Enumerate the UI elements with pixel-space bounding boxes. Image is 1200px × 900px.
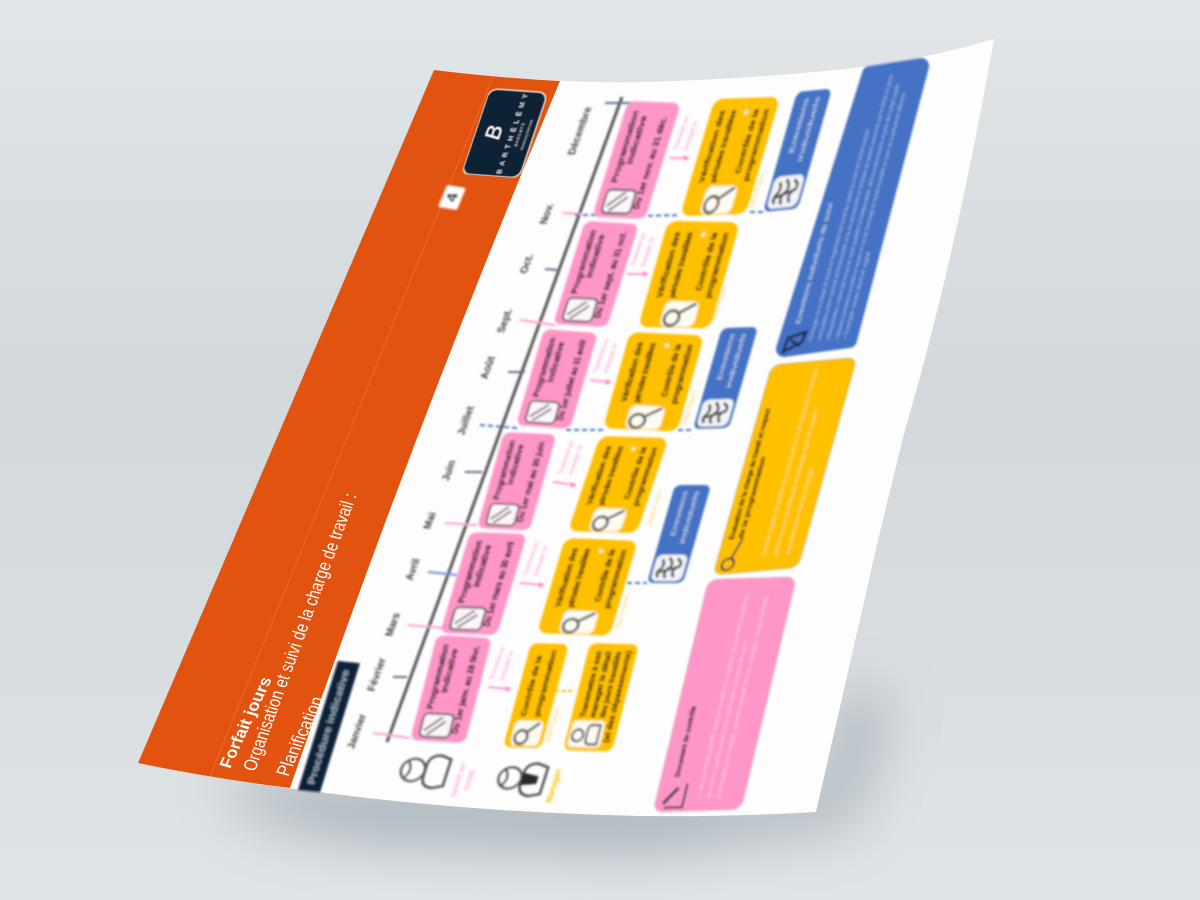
blue card: interview 1: individuels bbox=[679, 490, 701, 544]
interview text: • Compte rendu écrit et signé bbox=[843, 251, 872, 339]
month labels: Juin bbox=[440, 460, 459, 481]
panel: control document: Document de contrôle bbox=[674, 706, 698, 777]
yellow card: verification 5 bbox=[680, 97, 780, 216]
panel: workload evaluation: de la programmation bbox=[738, 456, 768, 539]
panel: control document: ainsi que le positionnement et la qualification des jours de repos bbox=[706, 641, 749, 799]
yellow card: verification 1 bbox=[537, 538, 638, 636]
panel: control document: Il est établi par le salarié, sous le contrôle de son manager, chaque période bbox=[716, 596, 770, 798]
month labels: Avril bbox=[404, 558, 423, 581]
icon: pencil bbox=[562, 298, 598, 322]
yellow card: transmit: des jours travaillés bbox=[597, 651, 623, 718]
interview text bbox=[790, 72, 921, 343]
yellow card: verification 2: programmation bbox=[631, 447, 660, 506]
yellow card: verification 2: Vérification des bbox=[585, 445, 614, 505]
transfer notes: manager le bbox=[603, 342, 620, 373]
icon: discussion bbox=[650, 555, 689, 581]
pink card: May: indicative bbox=[505, 444, 526, 485]
yellow card: verification 4 bbox=[638, 221, 740, 328]
pink card: March: Programmation bbox=[456, 540, 484, 603]
yellow card: transmit: manager le détail bbox=[587, 651, 614, 718]
pink card: September: Programmation bbox=[569, 230, 598, 294]
icon: pencil bbox=[662, 784, 688, 808]
interview text: • Échanges sur la charge de travail et l'organisation du travail du salarié au cours de l'année écoulée bbox=[807, 129, 872, 342]
pink card: September bbox=[553, 221, 639, 327]
procedure label bbox=[298, 661, 360, 792]
icon: magnifier bbox=[659, 301, 700, 327]
yellow card: verification 2: Contrôle de la bbox=[622, 446, 649, 499]
yellow card: verification 4: Contrôle de la bbox=[693, 232, 720, 291]
month labels: Juillet bbox=[456, 406, 477, 436]
sheet shadow bbox=[220, 690, 890, 852]
transfer notes: manager le bbox=[640, 236, 657, 267]
pink card: March: Du 1er mars au 30 avril bbox=[481, 541, 516, 627]
page number bbox=[438, 185, 466, 210]
panel: control document bbox=[653, 577, 796, 812]
month labels: Décembre bbox=[566, 107, 595, 155]
blue card: interview 2 bbox=[693, 327, 758, 429]
icon: pencil bbox=[485, 503, 520, 526]
pink card: November bbox=[592, 101, 681, 219]
pink transfer arrows bbox=[488, 155, 690, 692]
pink card: September: Du 1er sept. au 31 oct. bbox=[592, 231, 629, 318]
manager notes: Sous 8 jours bbox=[712, 285, 729, 320]
yellow card: control: Contrôle de la bbox=[519, 655, 544, 716]
yellow card: verification 3 bbox=[603, 332, 704, 432]
icon: magnifier bbox=[699, 185, 738, 214]
yellow card: verification 5: programmation bbox=[741, 109, 771, 182]
yellow connector bbox=[555, 690, 575, 692]
interview text: • Mesures correctrices à mettre en œuvre en cas de surcharge de travail constatée au cours de la période de référence bbox=[835, 92, 908, 339]
icon: magnifier bbox=[624, 405, 666, 430]
subtitle: Organisation et suivi de la charge de travail : bbox=[239, 491, 361, 773]
interview text: • Articulation entre l'activité professionnelle et la vie personnelle et familiale du salarié concerné par le forfait en jours bbox=[817, 74, 895, 341]
pink card: July bbox=[516, 329, 598, 429]
yellow card: verification 1: Contrôle de la bbox=[593, 549, 617, 602]
paper sheet bbox=[138, 39, 994, 816]
blue card: interview 3 bbox=[763, 88, 832, 212]
yellow card: transmit: Transmettre à son bbox=[578, 651, 604, 717]
pink card: November: Programmation bbox=[609, 111, 641, 183]
interview text: Entretiens individuels de suivi bbox=[795, 202, 835, 324]
pink card: January bbox=[410, 635, 492, 743]
blue card: interview 1: Entretiens bbox=[670, 490, 690, 536]
logo: AVOCATS bbox=[513, 122, 526, 147]
yellow card: verification 5: Vérification des bbox=[697, 110, 727, 183]
month labels: Mars bbox=[384, 612, 403, 637]
pink card: September: indicative bbox=[583, 234, 607, 278]
panel: workload evaluation: Ajustement de la charge bbox=[785, 467, 815, 554]
pink card: July: Du 1er juillet au 31 août bbox=[554, 339, 588, 421]
pink card: May: Du 1er mai au 30 juin bbox=[515, 441, 547, 522]
blue card: interview 3: individuels bbox=[795, 96, 822, 162]
orange header band bbox=[138, 70, 560, 788]
pink card: March: indicative bbox=[471, 545, 494, 587]
blue card: interview 2: individuels bbox=[725, 332, 748, 388]
panel: workload evaluation: Évaluation de la charge de travail et respect bbox=[727, 408, 773, 540]
transfer notes: manager le bbox=[683, 120, 700, 151]
month labels bbox=[346, 107, 595, 750]
logo: Strasbourg Mulhouse bbox=[520, 119, 534, 150]
month ticks bbox=[373, 103, 763, 738]
icon: magnifier bbox=[588, 508, 628, 532]
pink card: November: indicative bbox=[624, 116, 649, 165]
pink card: November: Du 1er nov. au 31 déc. bbox=[631, 116, 669, 209]
transfer notes: Transmet au bbox=[630, 232, 648, 266]
month labels: Nov. bbox=[538, 203, 557, 224]
page number: 4 bbox=[443, 192, 462, 203]
logo: BARTHÉLÉMY bbox=[494, 93, 530, 174]
month labels: Sept. bbox=[496, 308, 515, 333]
employee label: forfait bbox=[461, 769, 477, 791]
yellow card: transmit: (et des dépassements) bbox=[601, 650, 633, 743]
blue card: interview 3: Entretiens bbox=[787, 97, 811, 154]
icon: employee bbox=[396, 753, 452, 789]
yellow card: verification 2: périodes travaillées bbox=[597, 446, 625, 505]
icon: magnifier bbox=[720, 539, 743, 571]
icon: pencil bbox=[449, 607, 487, 630]
yellow card: verification 3: Contrôle de la bbox=[659, 343, 684, 397]
employee label bbox=[448, 763, 479, 798]
icon: magnifier bbox=[558, 610, 599, 634]
yellow card: verification 5: Contrôle de la bbox=[733, 109, 761, 174]
icon: discussion bbox=[696, 399, 735, 427]
icon: pencil bbox=[419, 713, 454, 738]
logo: B bbox=[479, 125, 508, 140]
month labels: Août bbox=[479, 356, 498, 379]
yellow card: verification 1: programmation bbox=[602, 550, 629, 609]
yellow card: verification 3: périodes travaillées bbox=[632, 342, 658, 403]
icon: discussion bbox=[766, 174, 805, 209]
blue card: interview 2: Entretiens bbox=[716, 333, 737, 380]
timeline axis bbox=[387, 97, 622, 742]
transfer notes: Transmet au bbox=[558, 440, 576, 474]
manager notes bbox=[545, 171, 767, 742]
panel: workload evaluation bbox=[713, 357, 857, 575]
yellow card: verification 1: Vérification des bbox=[553, 547, 580, 607]
transfer notes: manager le bbox=[499, 650, 516, 681]
icon: pencil bbox=[525, 401, 560, 424]
manager notes: Sous 8 jours bbox=[682, 389, 699, 424]
month labels: Février bbox=[366, 658, 389, 692]
icon: person bbox=[567, 720, 606, 748]
panel: interviews detail bbox=[783, 66, 921, 352]
panel: control document: Le document de contrôle recense la date et le nombre de journées travaillées bbox=[696, 594, 751, 799]
yellow card: verification 4: programmation bbox=[703, 233, 731, 299]
month labels: Mai bbox=[422, 512, 439, 530]
section label: Planification bbox=[272, 694, 328, 778]
panel: workload evaluation: Contrôle régulier du nombre de jours travaillés et de repos par le manager bbox=[761, 368, 820, 557]
pink card: July: Programmation bbox=[530, 337, 558, 397]
pink card: January: indicative bbox=[439, 648, 460, 693]
yellow card: transmit bbox=[563, 643, 639, 752]
interview text: • Rémunération, respect des temps de repos quotidien et hebdomadaire, droit à la déconnexion et prise des congés payés bbox=[826, 83, 901, 340]
blurred document content bbox=[298, 66, 921, 812]
yellow card: verification 4: périodes travaillées bbox=[666, 232, 695, 298]
yellow card: verification 3: programmation bbox=[669, 344, 695, 404]
procedure label: Procédure indicative bbox=[306, 669, 353, 785]
transfer notes: Transmet au bbox=[673, 116, 691, 150]
yellow card: control bbox=[503, 643, 569, 748]
transfer notes: Transmet au bbox=[489, 646, 507, 680]
panel: workload evaluation: Alerte en cas de difficulté et échange avec le salarié bbox=[773, 411, 820, 556]
icon: pencil bbox=[601, 189, 637, 214]
logo bbox=[461, 88, 548, 178]
icon: manager bbox=[494, 761, 549, 797]
pink card: May: Programmation bbox=[492, 440, 518, 500]
manager label: Manager bbox=[543, 768, 564, 803]
pink card: March bbox=[440, 532, 527, 635]
blue card: interview 1 bbox=[647, 485, 711, 583]
pink card: July: indicative bbox=[544, 341, 567, 383]
employee label: Salarié au bbox=[448, 763, 468, 797]
yellow card: verification 3: Vérification des bbox=[619, 342, 645, 402]
transfer notes: Transmet au bbox=[593, 338, 611, 372]
pink card: January: Programmation bbox=[424, 644, 451, 709]
yellow card: control: programmation bbox=[532, 650, 559, 717]
manager notes: Sous 8 jours bbox=[647, 490, 664, 525]
month labels: Janvier bbox=[346, 714, 369, 750]
title: Forfait jours bbox=[216, 675, 276, 770]
manager notes: Sous 8 jours bbox=[615, 593, 632, 628]
transfer notes: manager le bbox=[568, 444, 585, 475]
yellow card: verification 4: Vérification des bbox=[654, 231, 682, 298]
yellow card: verification 1: périodes travaillées bbox=[566, 548, 592, 608]
yellow card: verification 2 bbox=[568, 436, 669, 533]
yellow card: verification 5: périodes travaillées bbox=[708, 110, 738, 183]
manager notes: Sous 8 jours bbox=[748, 171, 767, 208]
transfer notes bbox=[489, 116, 700, 681]
icon: handshake bbox=[783, 332, 806, 352]
icon: magnifier bbox=[509, 720, 544, 746]
month labels: Oct. bbox=[519, 254, 536, 274]
transfer notes: Transmet au bbox=[523, 541, 541, 575]
pink card: May bbox=[477, 432, 556, 530]
pink card: January: Du 1er janv. au 28 févr. bbox=[449, 645, 482, 734]
manager notes: Sous 8 jours bbox=[545, 707, 562, 742]
transfer notes: manager le bbox=[533, 545, 550, 576]
